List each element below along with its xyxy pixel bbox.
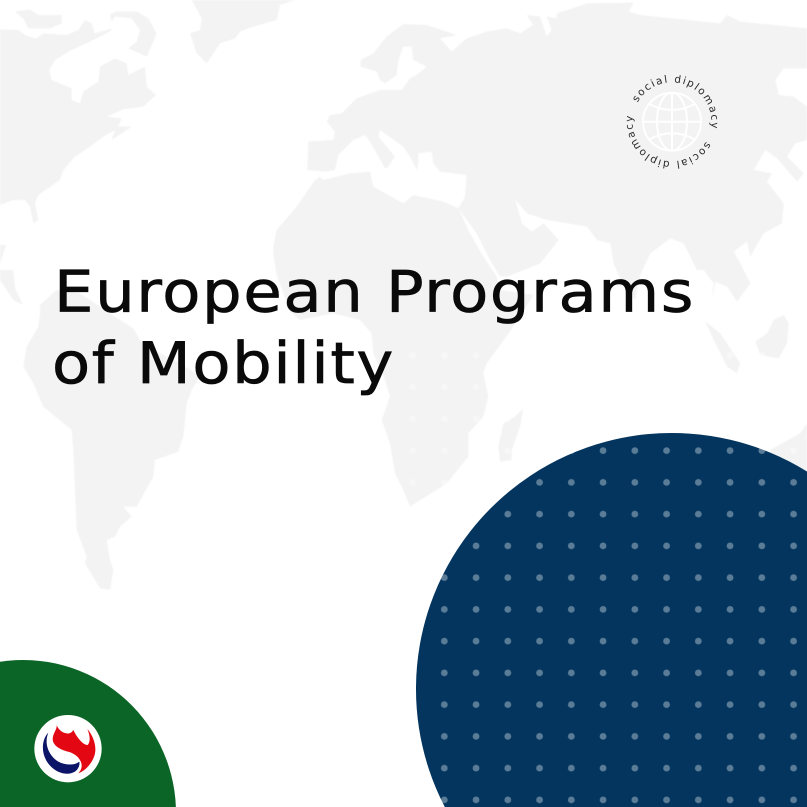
title line 2: of Mobility — [52, 331, 395, 397]
icon: globe — [643, 93, 701, 151]
map: South America — [23, 290, 200, 590]
world map background — [0, 0, 807, 590]
social diplomacy badge — [626, 74, 718, 169]
map: Madagascar — [498, 408, 523, 462]
title — [52, 260, 695, 397]
logo — [34, 715, 102, 782]
map: Australia — [770, 423, 807, 533]
map: Sumatra — [705, 322, 740, 373]
map: North America — [0, 20, 156, 223]
circular text: lower arc: social diplomacy — [626, 116, 710, 169]
map: Arctic island — [15, 9, 62, 28]
panel: blue dotted circle — [416, 433, 807, 807]
map: Greenland — [190, 0, 295, 63]
map: Central America — [0, 270, 23, 305]
title line 1: European Programs — [54, 260, 695, 326]
logo: white disc — [34, 715, 102, 782]
circular text: upper arc: social diplomacy — [634, 74, 718, 128]
logo: navy crescent — [43, 733, 79, 774]
map: Borneo — [755, 315, 789, 358]
map: Baffin island — [110, 12, 157, 57]
logo: red flame — [53, 725, 95, 773]
map: Africa — [273, 172, 533, 507]
map: Eurasia — [307, 3, 807, 302]
dot grid pattern — [397, 340, 807, 807]
panel: green circle — [0, 660, 176, 807]
map: Caribbean fragment — [0, 245, 6, 263]
